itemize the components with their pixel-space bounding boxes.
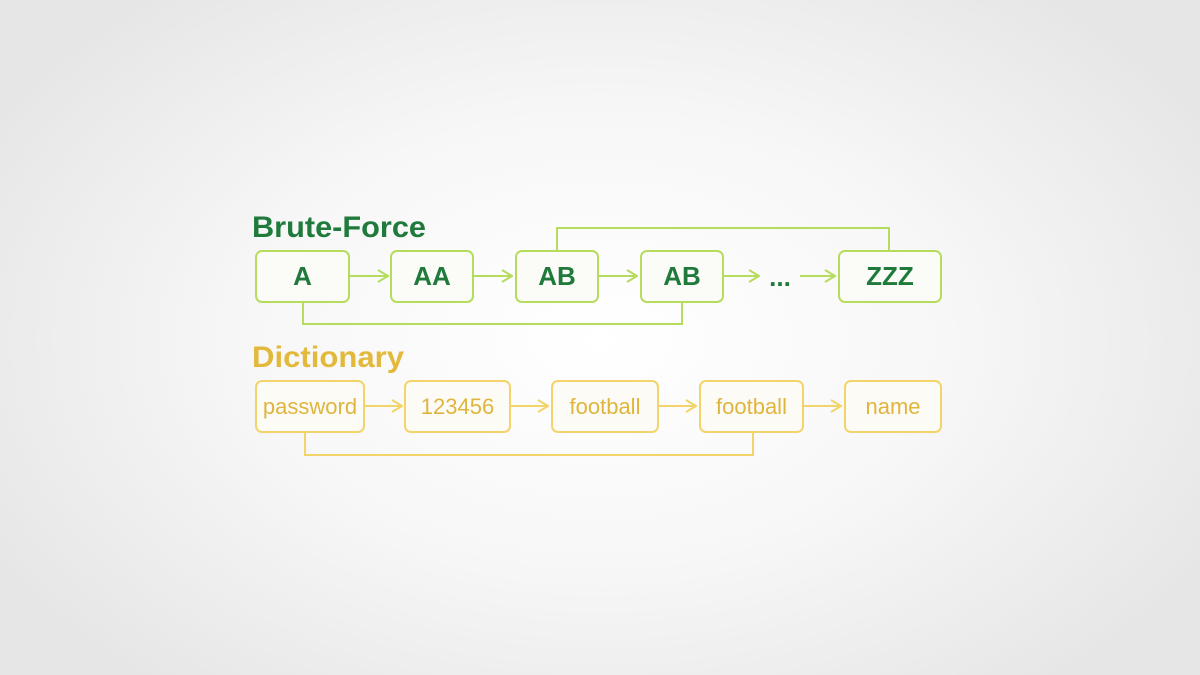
arrow bbox=[800, 275, 835, 277]
box: 123456: 123456 bbox=[421, 394, 494, 419]
dictionary row bbox=[256, 381, 941, 455]
box: AA bbox=[391, 251, 473, 302]
box: AB second: AB bbox=[663, 261, 701, 291]
connector: top loop bbox=[557, 228, 889, 251]
arrow bbox=[511, 405, 548, 407]
box: AB second bbox=[641, 251, 723, 302]
connector: bottom loop bbox=[305, 432, 753, 455]
box: football bbox=[552, 381, 658, 432]
box: name bbox=[845, 381, 941, 432]
arrow bbox=[724, 275, 759, 277]
box: football: football bbox=[570, 394, 640, 419]
box: name: name bbox=[865, 394, 921, 419]
arrow bbox=[474, 275, 512, 277]
box: AA: AA bbox=[413, 261, 451, 291]
arrow bbox=[350, 275, 388, 277]
box: football second: football bbox=[716, 394, 787, 419]
arrow bbox=[599, 275, 637, 277]
box: AB: AB bbox=[538, 261, 576, 291]
box: password: password bbox=[263, 394, 357, 419]
arrow bbox=[659, 405, 696, 407]
arrow bbox=[804, 405, 841, 407]
title: Dictionary: Dictionary bbox=[252, 341, 404, 374]
connector: bottom loop bbox=[303, 302, 682, 324]
box: ZZZ: ZZZ bbox=[866, 261, 914, 291]
box: ZZZ bbox=[839, 251, 941, 302]
box: A: A bbox=[293, 261, 312, 291]
box: password bbox=[256, 381, 364, 432]
box: A bbox=[256, 251, 349, 302]
brute-force row bbox=[256, 228, 941, 324]
ellipsis: ... bbox=[769, 262, 791, 292]
box: football second bbox=[700, 381, 803, 432]
arrow bbox=[365, 405, 402, 407]
title: Brute-Force: Brute-Force bbox=[252, 211, 426, 244]
box: AB bbox=[516, 251, 598, 302]
box: 123456 bbox=[405, 381, 510, 432]
